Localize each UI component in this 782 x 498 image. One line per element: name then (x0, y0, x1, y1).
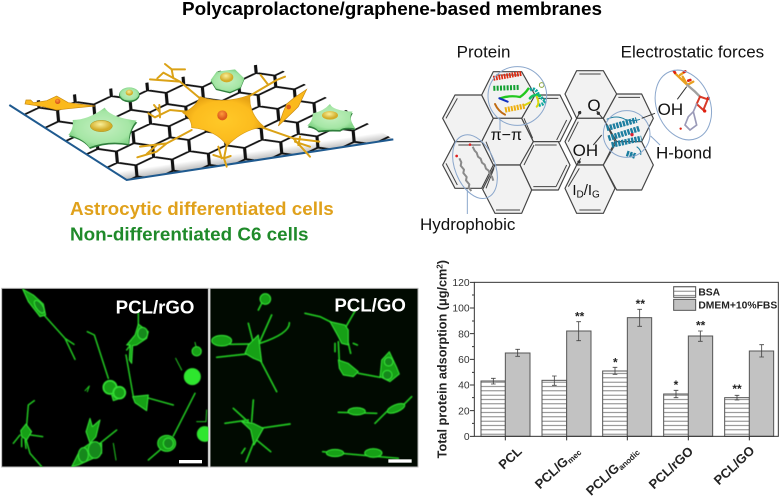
differentiated cell: right spindle (278, 89, 307, 126)
y tick labels: 60 (458, 355, 470, 366)
diagram: protein interactions on graphene (420, 42, 764, 234)
significance markers: * (674, 378, 679, 392)
astrocytic cell: star body with processes (137, 64, 319, 167)
legend: DMEM+10%FBS (698, 300, 777, 311)
nucleotide molecule (674, 71, 710, 130)
x category labels: PCL/G (583, 460, 622, 498)
significance markers: * (613, 355, 618, 369)
panel label: PCL/GO (334, 295, 406, 316)
illustration: cells on graphene membrane (9, 63, 393, 245)
micrographs (2, 288, 418, 467)
y tick labels: 0 (464, 432, 470, 443)
legend: astrocytic differentiated cells: Astrocytic differentiated cells (70, 198, 334, 219)
legend (674, 287, 777, 311)
label: O: O (587, 96, 601, 115)
x category labels: anodic (617, 448, 642, 472)
y tick labels: 20 (458, 406, 470, 417)
micrograph: PCL/rGO (2, 288, 212, 467)
label: ID/IG: /I (584, 182, 592, 199)
non-differentiated cell: right star (307, 104, 356, 132)
x category labels: PCL/GO (711, 443, 757, 488)
panel label: PCL/rGO (116, 296, 194, 317)
x category labels: PCL/rGO (646, 444, 696, 492)
dotted bond markers (577, 87, 687, 165)
significance markers: ** (732, 382, 742, 396)
y tick labels: 120 (452, 278, 470, 289)
bar chart: total protein adsorption (435, 260, 778, 498)
label: OH electrostatic: OH (658, 100, 683, 119)
legend: BSA (698, 288, 721, 299)
axes and ticks (470, 282, 778, 440)
x category labels: PCL (495, 444, 525, 472)
non-differentiated cell: small round (119, 87, 140, 102)
y axis title: ) (435, 260, 449, 264)
x category labels: PCL/G (532, 454, 571, 492)
label: OH hydroxyl: OH (573, 141, 598, 160)
label: hydrophobic: Hydrophobic (420, 215, 516, 234)
y axis title: Total protein adsorption (μg/cm (435, 269, 449, 458)
protein: H-bond site (607, 117, 642, 156)
significance markers: ** (636, 297, 645, 311)
significance markers: ** (575, 310, 585, 324)
x category labels: mec (566, 448, 584, 465)
label: protein: Protein (457, 42, 510, 61)
bars: DMEM+10%FBS (505, 318, 774, 436)
hexagon lattice (443, 71, 653, 213)
significance markers (575, 297, 742, 396)
label: ID/IG: D (577, 190, 584, 201)
double bonds (446, 74, 640, 210)
y tick labels: 40 (458, 381, 470, 392)
y tick labels: 100 (452, 304, 470, 315)
label: pi-pi: π−π (491, 127, 522, 144)
bars: BSA (481, 371, 749, 436)
label: electrostatic forces: Electrostatic forces (621, 42, 764, 61)
fatty acid chains (455, 143, 493, 191)
legend: non-differentiated C6 cells: Non-differentiated C6 cells (70, 224, 309, 245)
micrograph: PCL/GO (210, 288, 418, 467)
membrane sheet with honeycomb lattice (9, 63, 393, 180)
error bars (491, 309, 764, 400)
differentiated cell: left spindle (25, 96, 95, 110)
y tick labels (452, 278, 470, 443)
significance markers: ** (696, 319, 706, 333)
scale bar (388, 459, 412, 463)
non-differentiated cell: large star (68, 108, 137, 149)
y axis title: 2 (435, 264, 444, 269)
y tick labels: 80 (458, 329, 470, 340)
label: ID/IG: I (572, 182, 577, 199)
scale bar (179, 460, 202, 463)
label: ID/IG: G (592, 190, 600, 201)
label: H-bond: H-bond (656, 143, 712, 162)
interaction circles and leader lines (444, 62, 722, 214)
x category labels (495, 443, 757, 498)
protein ribbon: pi-pi site (493, 73, 545, 115)
non-differentiated cell: top round (211, 69, 244, 93)
